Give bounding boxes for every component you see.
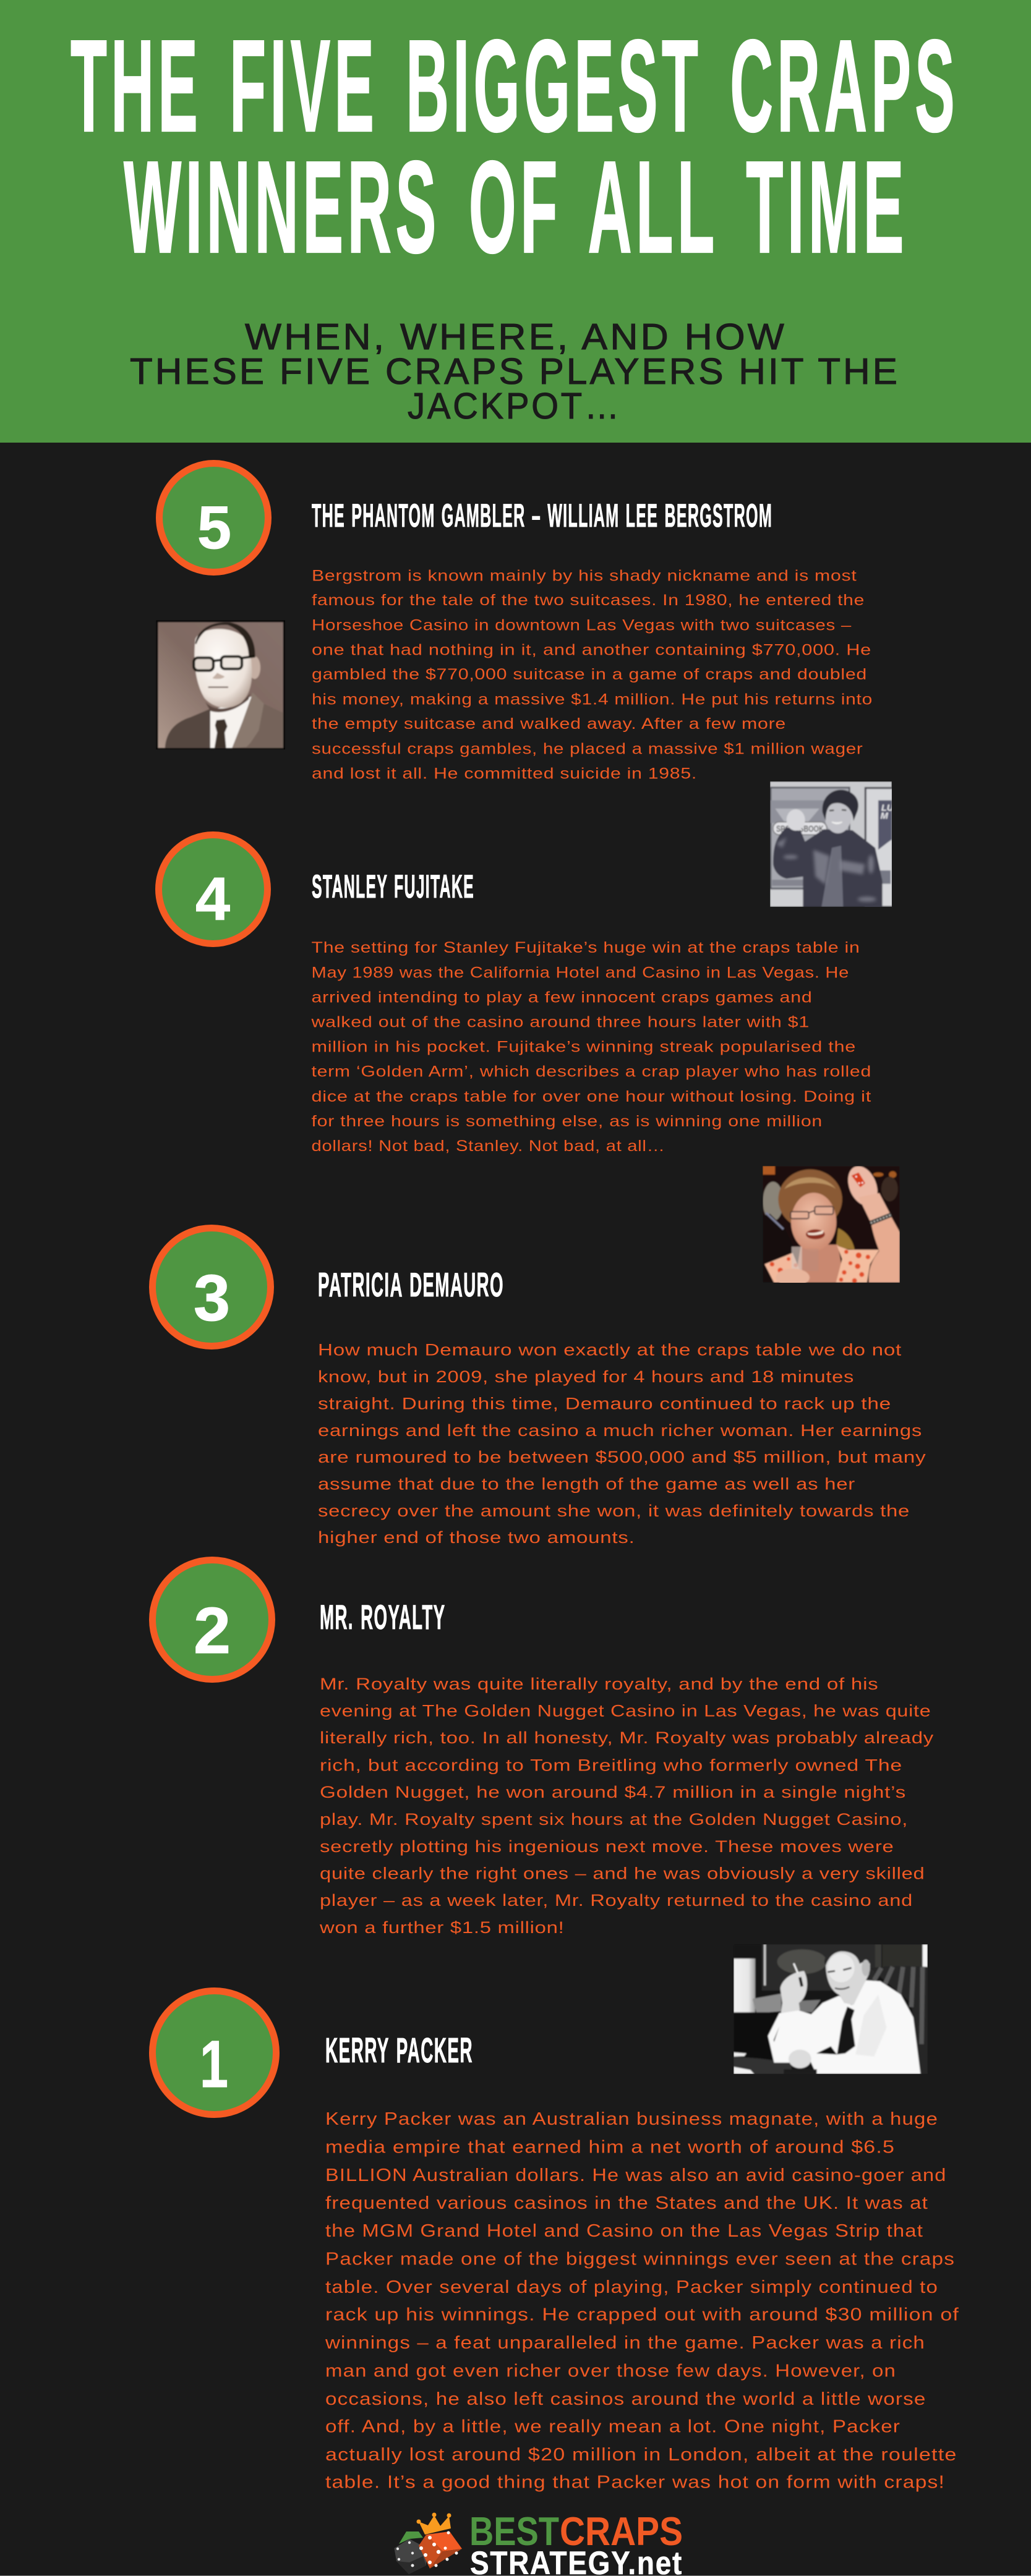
body text: million in his pocket. Fujitake’s winning streak popularised the: [312, 1039, 856, 1056]
heading: PATRICIA DEMAURO: [318, 1265, 504, 1304]
body text: table. It’s a good thing that Packer was hot on form with craps!: [325, 2473, 945, 2493]
body text: occasions, he also left casinos around the world a little worse: [325, 2389, 926, 2409]
number badge 1: [152, 1991, 276, 2114]
number badge 5: [160, 464, 268, 572]
body text: quite clearly the right ones – and he was obviously a very skilled: [320, 1864, 925, 1883]
body text: BILLION Australian dollars. He was also an avid casino-goer and: [325, 2166, 946, 2185]
body text: gambled the $770,000 suitcase in a game of craps and doubled: [312, 666, 867, 683]
body text: literally rich, too. In all honesty, Mr. Royalty was probably already: [320, 1728, 934, 1747]
body text: earnings and left the casino a much richer woman. Her earnings: [318, 1421, 922, 1440]
body text: Golden Nugget, he won around $4.7 million in a single night’s: [320, 1783, 906, 1801]
body text: play. Mr. Royalty spent six hours at the Golden Nugget Casino,: [320, 1810, 908, 1829]
body text: How much Demauro won exactly at the craps table we do not: [318, 1341, 902, 1359]
logo wordmark: BEST: [469, 2509, 559, 2554]
body text: dice at the craps table for over one hour without losing. Doing it: [312, 1088, 871, 1105]
photo: Stanley Fujitake: SPORTSBOOK: [776, 824, 824, 834]
logo: Best Craps Strategy: [395, 2509, 683, 2576]
body text: off. And, by a little, we really mean a lot. One night, Packer: [325, 2417, 901, 2437]
panel: number 4 Fujitake: STANLEY FUJITAKE: [312, 869, 474, 905]
body text: Kerry Packer was an Australian business magnate, with a huge: [325, 2109, 938, 2129]
number badge 3: [152, 1228, 271, 1346]
body text: [325, 2109, 959, 2493]
panel: number 1 Kerry Packer: [152, 1944, 959, 2493]
photo: Kerry Packer: [734, 1944, 928, 2074]
logo wordmark: [469, 2509, 683, 2576]
body text: The setting for Stanley Fujitake’s huge win at the craps table in: [312, 939, 860, 956]
body text: [318, 1341, 926, 1547]
number badge 2: [152, 1560, 272, 1679]
body text: term ‘Golden Arm’, which describes a crap player who has rolled: [312, 1063, 871, 1080]
body text: actually lost around $20 million in London, albeit at the roulette: [325, 2445, 957, 2465]
body text: [319, 1675, 934, 1937]
panel: number 5 Bergstrom: [156, 464, 873, 782]
panel: number 2 Mr. Royalty: MR. ROYALTY: [320, 1597, 445, 1636]
body text: won a further $1.5 million!: [319, 1918, 564, 1937]
body text: secretly plotting his ingenious next move. These moves were: [320, 1837, 894, 1856]
photo: Stanley Fujitake: M: [881, 812, 889, 822]
body text: rack up his winnings. He crapped out with around $30 million of: [325, 2305, 959, 2325]
panel: number 3 Demauro: [152, 1162, 926, 1547]
body text: rich, but according to Tom Breitling who formerly owned The: [320, 1756, 902, 1774]
number badge 1: 1: [200, 2026, 228, 2101]
body text: his money, making a massive $1.4 million. He put his returns into: [312, 691, 873, 708]
body text: and lost it all. He committed suicide in 1985.: [312, 765, 697, 782]
body text: evening at The Golden Nugget Casino in Las Vegas, he was quite: [320, 1702, 931, 1720]
body text: dollars! Not bad, Stanley. Not bad, at all…: [312, 1137, 665, 1155]
body text: table. Over several days of playing, Packer simply continued to: [325, 2277, 938, 2297]
body text: one that had nothing in it, and another containing $770,000. He: [312, 641, 871, 658]
body text: know, but in 2009, she played for 4 hours and 18 minutes: [318, 1367, 854, 1386]
subtitle: JACKPOT…: [408, 386, 622, 427]
photo: William Lee Bergstrom: [156, 620, 285, 749]
photo: Stanley Fujitake: LU: [881, 803, 894, 813]
body text: higher end of those two amounts.: [318, 1528, 635, 1547]
number badge 3: 3: [194, 1262, 230, 1335]
photo: Stanley Fujitake: [770, 781, 894, 907]
panel: number 1 Kerry Packer: KERRY PACKER: [325, 2031, 473, 2070]
panel: number 2 Mr. Royalty: [152, 1560, 934, 1937]
body text: man and got even richer over those few days. However, on: [325, 2361, 896, 2381]
logo wordmark: CRAPS: [560, 2509, 683, 2554]
subtitle: WHEN, WHERE, AND HOW: [245, 317, 787, 357]
body text: media empire that earned him a net worth of around $6.5: [325, 2138, 895, 2157]
body text: Bergstrom is known mainly by his shady nickname and is most: [312, 567, 857, 584]
header panel: [0, 0, 1031, 443]
body text: straight. During this time, Demauro continued to rack up the: [318, 1394, 891, 1413]
panel: number 4 Fujitake: [158, 781, 894, 1155]
subtitle: [130, 317, 900, 427]
body text: frequented various casinos in the States and the UK. It was at: [325, 2193, 928, 2213]
number badge 4: [158, 835, 267, 943]
body text: [312, 567, 873, 782]
body text: are rumoured to be between $500,000 and $5 million, but many: [318, 1448, 926, 1466]
body text: for three hours is something else, as is winning one million: [312, 1113, 823, 1130]
number badge 5: 5: [197, 493, 231, 561]
body text: player – as a week later, Mr. Royalty returned to the casino and: [320, 1891, 913, 1910]
icon: dice and crown: [395, 2512, 462, 2574]
body text: May 1989 was the California Hotel and Casino in Las Vegas. He: [312, 964, 849, 982]
body text: successful craps gambles, he placed a massive $1 million wager: [312, 740, 863, 757]
body text: secrecy over the amount she won, it was definitely towards the: [318, 1502, 910, 1520]
body text: Packer made one of the biggest winnings ever seen at the craps: [325, 2249, 955, 2269]
number badge 2: 2: [194, 1594, 231, 1667]
number badge 4: 4: [195, 865, 230, 933]
photo: Patricia Demauro: [763, 1162, 900, 1286]
body text: Mr. Royalty was quite literally royalty, and by the end of his: [320, 1675, 878, 1693]
body text: walked out of the casino around three hours later with $1: [310, 1013, 810, 1031]
title: [71, 12, 959, 280]
body text: famous for the tale of the two suitcases. In 1980, he entered the: [312, 592, 865, 609]
body text: Horseshoe Casino in downtown Las Vegas with two suitcases –: [312, 616, 852, 634]
body text: [310, 939, 871, 1155]
body text: assume that due to the length of the game as well as her: [318, 1475, 855, 1494]
body text: the MGM Grand Hotel and Casino on the Las Vegas Strip that: [325, 2221, 923, 2241]
subtitle: THESE FIVE CRAPS PLAYERS HIT THE: [130, 351, 900, 392]
body text: the empty suitcase and walked away. After a few more: [312, 715, 786, 733]
body text: winnings – a feat unparalleled in the game. Packer was a rich: [325, 2333, 925, 2353]
body text: arrived intending to play a few innocent craps games and: [312, 989, 813, 1006]
